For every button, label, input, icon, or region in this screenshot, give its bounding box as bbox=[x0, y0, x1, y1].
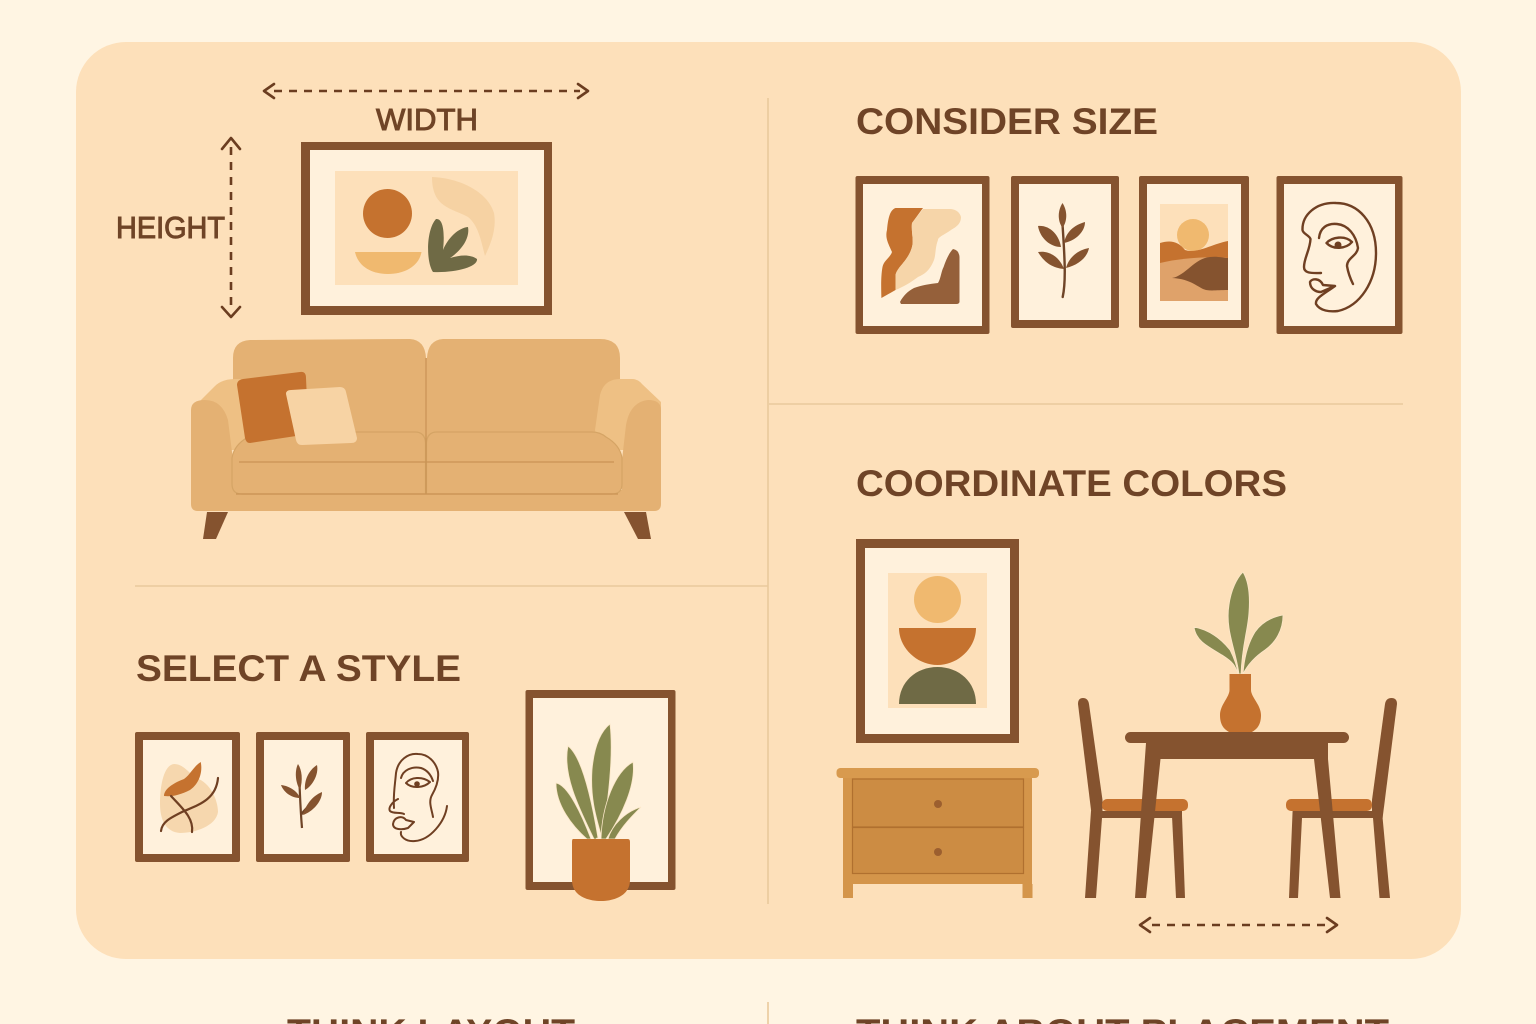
sofa bbox=[191, 339, 661, 539]
pillow: cream bbox=[286, 387, 357, 445]
dining chair right bbox=[1286, 698, 1397, 898]
heading: consider size: CONSIDER SIZE bbox=[856, 101, 1158, 142]
small frame: face bbox=[366, 732, 469, 862]
small frame: abstract bbox=[135, 732, 240, 862]
tall frame with potted plant bbox=[526, 690, 676, 901]
height label: HEIGHT bbox=[116, 210, 225, 245]
small frame: sprig bbox=[256, 732, 350, 862]
height arrow bbox=[222, 138, 240, 317]
width arrow bbox=[264, 84, 588, 98]
framed art above sofa bbox=[301, 142, 552, 315]
width label: WIDTH bbox=[376, 102, 478, 137]
heading: coordinate colors: COORDINATE COLORS bbox=[856, 463, 1287, 504]
distance arrow bbox=[1140, 918, 1337, 932]
dining table bbox=[1125, 732, 1349, 898]
frame: abstract shapes bbox=[856, 176, 990, 334]
frame: line face bbox=[1276, 176, 1402, 334]
dining chair left bbox=[1078, 698, 1188, 898]
frame: leaf branch bbox=[1011, 176, 1119, 328]
vase with plant bbox=[1194, 572, 1283, 732]
dresser bbox=[836, 768, 1039, 898]
heading: select a style: SELECT A STYLE bbox=[136, 648, 461, 689]
pillow: orange bbox=[237, 372, 307, 443]
frame: landscape bbox=[1139, 176, 1249, 328]
framed art above dresser bbox=[856, 539, 1019, 743]
